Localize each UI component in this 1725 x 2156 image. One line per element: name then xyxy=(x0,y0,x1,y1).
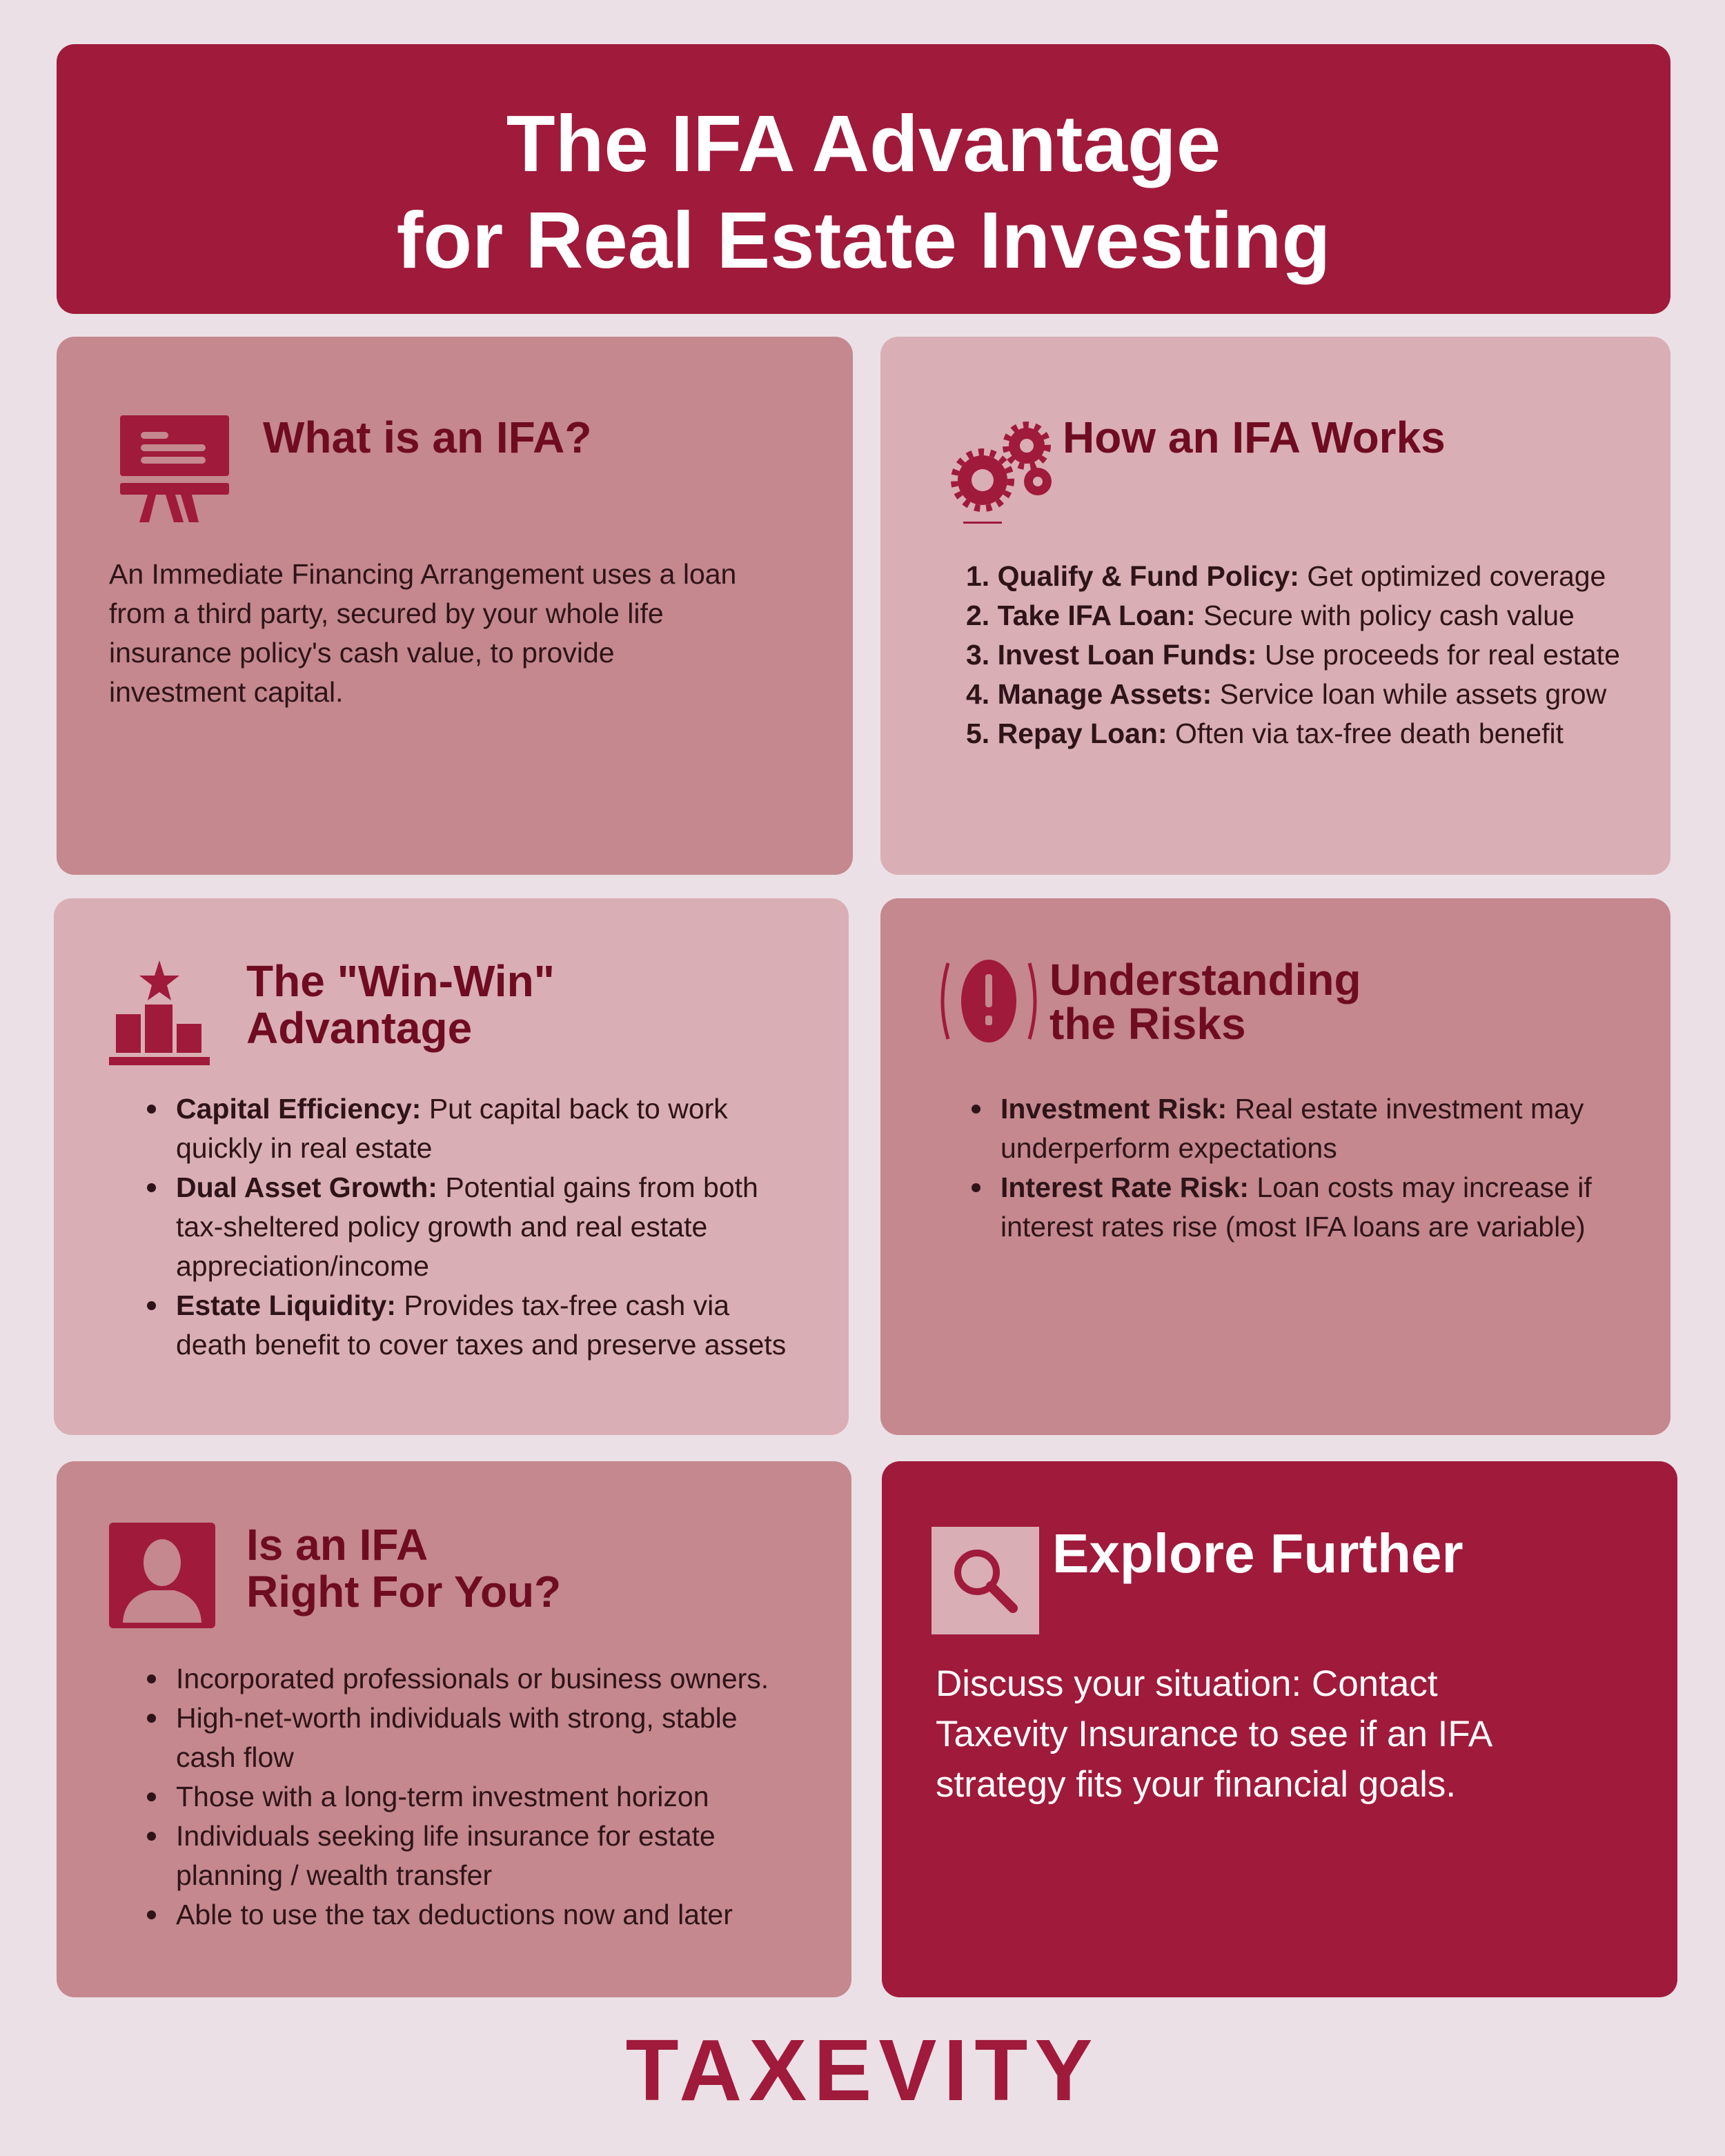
heading xyxy=(1049,955,1361,1049)
bullet list: Able to use the tax deductions now and later xyxy=(176,1899,733,1930)
numbered steps: 3. Invest Loan Funds: Use proceeds for real estate xyxy=(966,639,1620,671)
heading: The "Win-Win" xyxy=(246,956,555,1006)
body text: from a third party, secured by your whole life xyxy=(109,597,664,629)
title text: for Real Estate Investing xyxy=(397,195,1330,285)
bullet list: Those with a long-term investment horizon xyxy=(176,1781,709,1812)
bullet list: Individuals seeking life insurance for estate xyxy=(176,1820,716,1852)
icon: presentation board xyxy=(120,415,229,522)
heading: the Risks xyxy=(1049,999,1246,1049)
heading: Right For You? xyxy=(246,1567,561,1616)
bullet list: appreciation/income xyxy=(176,1250,429,1282)
heading: Explore Further xyxy=(1052,1523,1463,1584)
bullet list xyxy=(147,1663,769,1930)
body text: strategy fits your financial goals. xyxy=(936,1764,1456,1805)
body text: investment capital. xyxy=(109,676,344,708)
numbered steps: 2. Take IFA Loan: Secure with policy cash value xyxy=(966,600,1575,631)
bullet list: Incorporated professionals or business owners. xyxy=(176,1663,769,1694)
icon: person silhouette xyxy=(109,1523,215,1628)
icon: gears xyxy=(951,422,1052,524)
panel: is an IFA right for you xyxy=(57,1461,851,1997)
bullet list xyxy=(147,1093,786,1361)
panel: what is an IFA xyxy=(57,337,853,875)
heading: Advantage xyxy=(246,1003,472,1053)
numbered steps: 1. Qualify & Fund Policy: Get optimized coverage xyxy=(966,560,1606,592)
bullet list: Dual Asset Growth: Potential gains from both xyxy=(176,1171,758,1203)
numbered steps xyxy=(966,560,1620,749)
title text xyxy=(397,99,1330,285)
title banner xyxy=(57,44,1670,314)
heading: How an IFA Works xyxy=(1063,413,1446,462)
panel: explore further xyxy=(882,1461,1677,1997)
numbered steps: 5. Repay Loan: Often via tax-free death benefit xyxy=(966,718,1564,749)
bullet list xyxy=(972,1093,1592,1243)
bullet list: cash flow xyxy=(176,1741,294,1773)
body text: insurance policy's cash value, to provide xyxy=(109,637,615,669)
body text xyxy=(109,558,736,708)
bullet list: underperform expectations xyxy=(1000,1132,1337,1164)
panel: win-win advantage xyxy=(54,898,849,1435)
heading: What is an IFA? xyxy=(263,413,591,462)
bullet list: Interest Rate Risk: Loan costs may increase if xyxy=(1000,1171,1592,1203)
panel: how an IFA works xyxy=(880,337,1670,875)
body text: Taxevity Insurance to see if an IFA xyxy=(936,1714,1492,1754)
heading xyxy=(246,956,555,1053)
body text: Discuss your situation: Contact xyxy=(936,1663,1438,1704)
heading: Understanding xyxy=(1049,955,1361,1005)
heading xyxy=(246,1520,561,1616)
icon: podium with star xyxy=(109,960,210,1065)
icon: magnifier xyxy=(931,1527,1039,1634)
body text xyxy=(936,1663,1493,1805)
bullet list: interest rates rise (most IFA loans are variable) xyxy=(1000,1211,1586,1243)
panel: understanding the risks xyxy=(880,898,1670,1435)
bullet list: Estate Liquidity: Provides tax-free cash via xyxy=(176,1289,729,1321)
bullet list: tax-sheltered policy growth and real estate xyxy=(176,1211,707,1243)
bullet list: quickly in real estate xyxy=(176,1132,432,1164)
bullet list: planning / wealth transfer xyxy=(176,1859,492,1891)
bullet list: death benefit to cover taxes and preserve assets xyxy=(176,1329,786,1361)
bullet list: High-net-worth individuals with strong, stable xyxy=(176,1702,738,1734)
numbered steps: 4. Manage Assets: Service loan while assets grow xyxy=(966,678,1606,710)
title text: The IFA Advantage xyxy=(506,99,1221,188)
heading: Is an IFA xyxy=(246,1520,428,1570)
bullet list: Investment Risk: Real estate investment may xyxy=(1000,1093,1584,1125)
body text: An Immediate Financing Arrangement uses a loan xyxy=(109,558,736,590)
logo: TAXEVITY: TAXEVITY xyxy=(626,2021,1099,2119)
icon: warning exclamation xyxy=(941,960,1036,1042)
bullet list: Capital Efficiency: Put capital back to work xyxy=(176,1093,728,1125)
